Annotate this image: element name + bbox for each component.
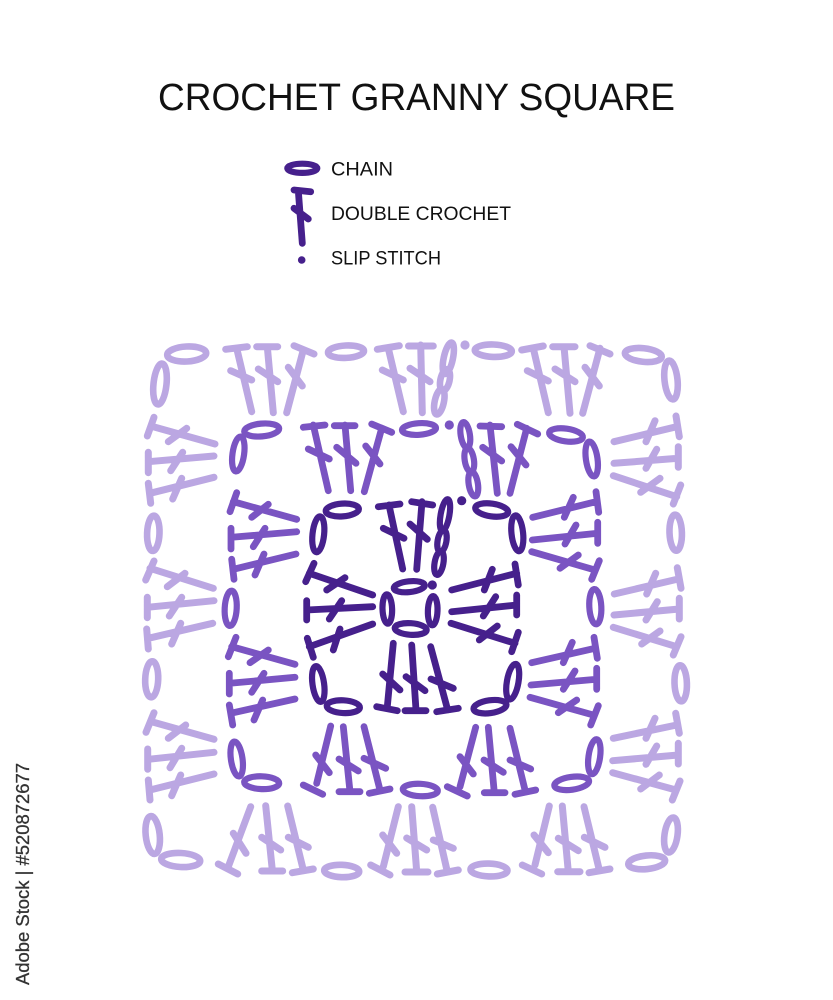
corner chains top-left [151, 345, 207, 405]
corner chains bottom-right [473, 663, 522, 715]
corner chains top-right [548, 426, 600, 477]
left stitches group 1 [147, 417, 215, 503]
right stitches [451, 564, 518, 652]
legend icon: double crochet [294, 190, 311, 243]
top chain 1 [328, 345, 364, 359]
top stitches left [303, 424, 392, 492]
left stitches group 3 [146, 713, 214, 800]
bottom chain 1 [324, 864, 359, 878]
round 2 and centre: dark purple [306, 496, 525, 715]
joining twist [433, 498, 452, 576]
centre ring chains [382, 580, 438, 636]
legend [287, 158, 511, 270]
top stitches group 1 [226, 346, 314, 413]
right chain [588, 589, 602, 625]
right stitches group 3 [613, 713, 680, 800]
left chain 2 [145, 661, 159, 698]
right chain 1 [669, 514, 683, 551]
corner chains bottom-right [553, 738, 602, 792]
right stitches lower [530, 637, 598, 725]
top stitches group 3 [522, 346, 610, 413]
top stitches [378, 502, 433, 569]
legend label: double crochet: DOUBLE CROCHET [331, 203, 511, 225]
slip stitch [445, 420, 454, 430]
granny square chart [144, 340, 688, 878]
corner chains top-right [474, 501, 525, 552]
corner chains bottom-left [144, 815, 201, 868]
left stitches group 2 [146, 561, 214, 649]
corner chains bottom-left [310, 665, 360, 714]
joining twist top [432, 342, 456, 415]
bottom stitches [377, 643, 458, 712]
legend label: slip stitch: SLIP STITCH [331, 248, 441, 270]
image id side text: Adobe Stock | #520872677 [13, 763, 33, 985]
slip stitch [460, 340, 470, 350]
legend label: chain: CHAIN [331, 158, 393, 180]
bottom stitches right [447, 727, 536, 796]
right stitches group 2 [613, 568, 681, 655]
joining twist [459, 421, 480, 497]
left stitches lower [228, 637, 295, 725]
top chain 2 [475, 344, 512, 358]
left stitches upper [230, 493, 297, 579]
bottom stitches group 3 [522, 806, 610, 874]
top stitches group 2 [377, 345, 433, 413]
bottom stitches group 2 [371, 807, 458, 875]
left stitches [306, 563, 373, 657]
bottom stitches left [303, 726, 390, 794]
corner chains top-left [230, 422, 280, 472]
top chain [402, 422, 436, 436]
corner chains top-right [624, 346, 680, 400]
title: CROCHET GRANNY SQUARE [158, 77, 675, 119]
right stitches upper [532, 492, 599, 579]
legend icon: chain [287, 164, 317, 173]
bottom chain [402, 783, 438, 797]
top stitches right [480, 424, 538, 493]
centre slip stitch [428, 580, 437, 590]
corner chains bottom-right [628, 817, 680, 871]
corner chains bottom-left [229, 741, 279, 790]
legend icon: slip stitch [298, 256, 306, 264]
slip stitch [457, 496, 466, 505]
left chain [224, 590, 238, 626]
corner chains top-left [311, 502, 359, 553]
round 4: outer light round [144, 340, 688, 878]
left chain 1 [146, 515, 160, 551]
bottom chain 2 [470, 863, 508, 877]
right stitches group 1 [613, 416, 681, 504]
right chain 2 [674, 665, 688, 702]
bottom stitches group 1 [218, 806, 313, 874]
round 3: medium purple round [224, 420, 602, 797]
